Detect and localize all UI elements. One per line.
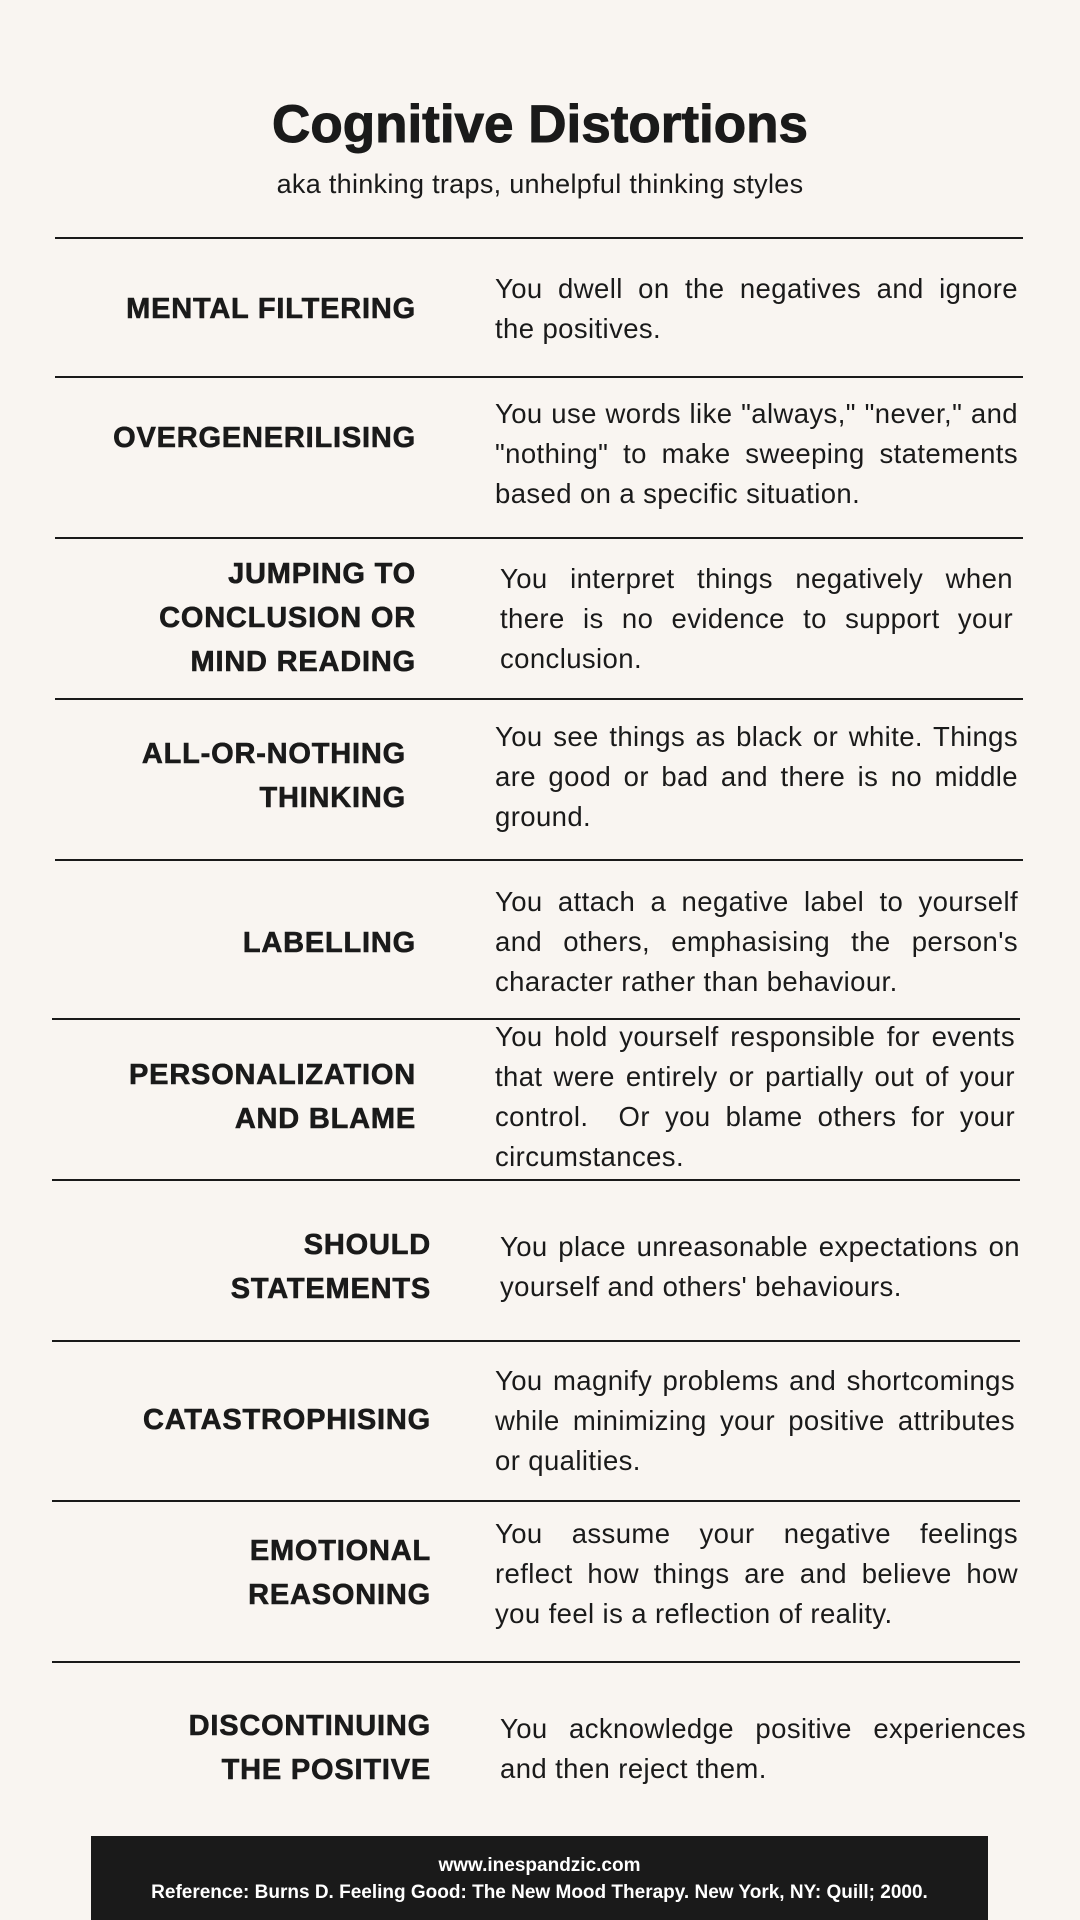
label: overgeneralising: OVERGENERILISING	[113, 422, 416, 454]
desc: catastrophising: You magnify problems and shortcomings while minimizing your positive attributes or qualities.	[495, 1365, 1015, 1476]
label: should statements	[231, 1229, 431, 1305]
desc: overgeneralising: You use words like "always," "never," and "nothing" to make sweeping statements based on a specific situation.	[495, 398, 1018, 509]
title: Cognitive Distortions	[272, 95, 808, 154]
label: personalization	[129, 1059, 416, 1135]
footer	[91, 1836, 988, 1920]
label: all-or-nothing: THINKING	[259, 782, 406, 814]
label: should statements: SHOULD	[304, 1229, 431, 1261]
label: personalization: PERSONALIZATION	[129, 1059, 416, 1091]
desc: discontinuing the positive: You acknowledge positive experiences and then reject them.	[500, 1713, 1026, 1784]
desc: personalization: You hold yourself responsible for events that were entirely or partially out of your control. Or you blame others for your circumstances.	[495, 1021, 1015, 1172]
desc: labelling: You attach a negative label to yourself and others, emphasising the person's character rather than behaviour.	[495, 886, 1018, 997]
label: all-or-nothing: ALL-OR-NOTHING	[142, 738, 406, 770]
footer: Reference: Burns D. Feeling Good: The New Mood Therapy. New York, NY: Quill; 2000.	[151, 1882, 928, 1903]
label: all-or-nothing	[142, 738, 406, 814]
desc: all-or-nothing: You see things as black or white. Things are good or bad and there is no middle ground.	[495, 721, 1018, 832]
label: mental filtering: MENTAL FILTERING	[126, 293, 416, 325]
desc: jumping to conclusion: You interpret things negatively when there is no evidence to support your conclusion.	[500, 563, 1013, 674]
desc: mental filtering: You dwell on the negatives and ignore the positives.	[495, 273, 1018, 344]
label: should statements: STATEMENTS	[231, 1273, 431, 1305]
label: labelling: LABELLING	[243, 927, 416, 959]
subtitle: aka thinking traps, unhelpful thinking styles	[277, 169, 803, 199]
label: personalization: AND BLAME	[235, 1103, 416, 1135]
footer: www.inespandzic.com	[438, 1855, 640, 1876]
label: emotional reasoning: REASONING	[248, 1579, 431, 1611]
label: jumping to conclusion: MIND READING	[190, 646, 416, 678]
label: catastrophising: CATASTROPHISING	[143, 1404, 431, 1436]
label: discontinuing the positive	[189, 1710, 431, 1786]
desc: should statements: You place unreasonable expectations on yourself and others' behaviours.	[500, 1231, 1020, 1302]
label: jumping to conclusion: JUMPING TO	[228, 558, 416, 590]
label: discontinuing the positive: DISCONTINUING	[189, 1710, 431, 1742]
label: emotional reasoning	[248, 1535, 431, 1611]
label: jumping to conclusion	[159, 558, 416, 678]
desc: emotional reasoning: You assume your negative feelings reflect how things are and believe how you feel is a reflection of reality.	[495, 1518, 1018, 1629]
label: jumping to conclusion: CONCLUSION OR	[159, 602, 416, 634]
label: discontinuing the positive: THE POSITIVE	[222, 1754, 431, 1786]
label: emotional reasoning: EMOTIONAL	[250, 1535, 431, 1567]
